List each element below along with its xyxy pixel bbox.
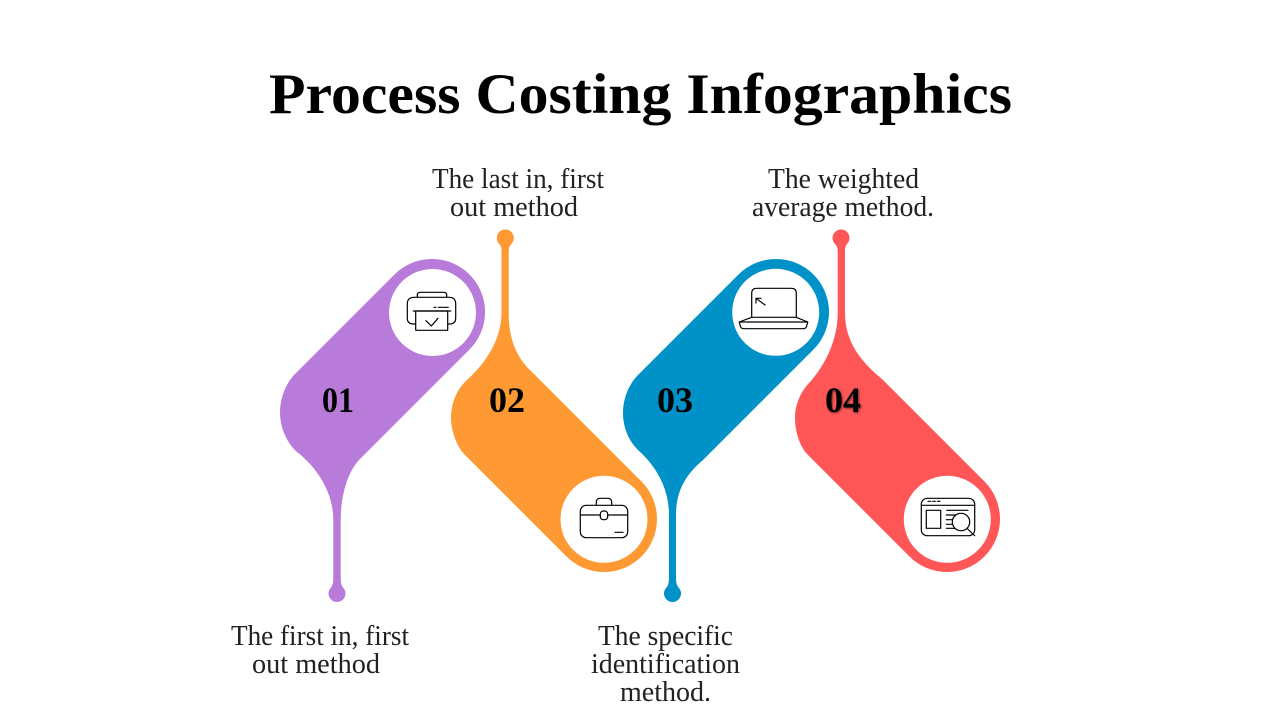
icon: briefcase (580, 498, 628, 538)
label: first in first out: The first in, first (231, 621, 409, 652)
number 04: 04 (825, 380, 861, 420)
icon circle 01 (389, 269, 476, 356)
panel: step 02 last in first out (451, 229, 657, 572)
label: first in first out (231, 621, 409, 680)
number 02: 02 (489, 380, 525, 420)
label: first in first out: out method (252, 649, 380, 680)
purple drop shape (280, 259, 485, 602)
icon circle 03 (732, 269, 819, 356)
label: last in first out: out method (450, 192, 578, 223)
icon circle 02 (560, 476, 648, 563)
red drop shape (795, 229, 1000, 572)
icon: laptop (739, 288, 808, 329)
title: Process Costing Infographics (269, 63, 1012, 126)
icon: web page search (921, 498, 975, 536)
label: specific identification: method. (620, 677, 711, 708)
label: weighted average: The weighted (768, 164, 919, 195)
icon circle 04 (904, 476, 991, 563)
label: specific identification (591, 621, 740, 708)
label: weighted average (752, 164, 934, 223)
orange drop shape (451, 229, 657, 572)
number 01: 01 (322, 380, 354, 420)
panel: step 04 weighted average (795, 229, 1000, 572)
blue drop shape (623, 259, 829, 602)
label: last in first out: The last in, first (432, 164, 604, 195)
panel: step 03 specific identification (623, 259, 829, 602)
number 03: 03 (657, 380, 693, 420)
icon: printer (407, 292, 456, 330)
label: specific identification: identification (591, 649, 740, 680)
label: last in first out (432, 164, 604, 223)
label: specific identification: The specific (598, 621, 733, 652)
label: weighted average: average method. (752, 192, 934, 223)
panel: step 01 first in first out (280, 259, 485, 602)
